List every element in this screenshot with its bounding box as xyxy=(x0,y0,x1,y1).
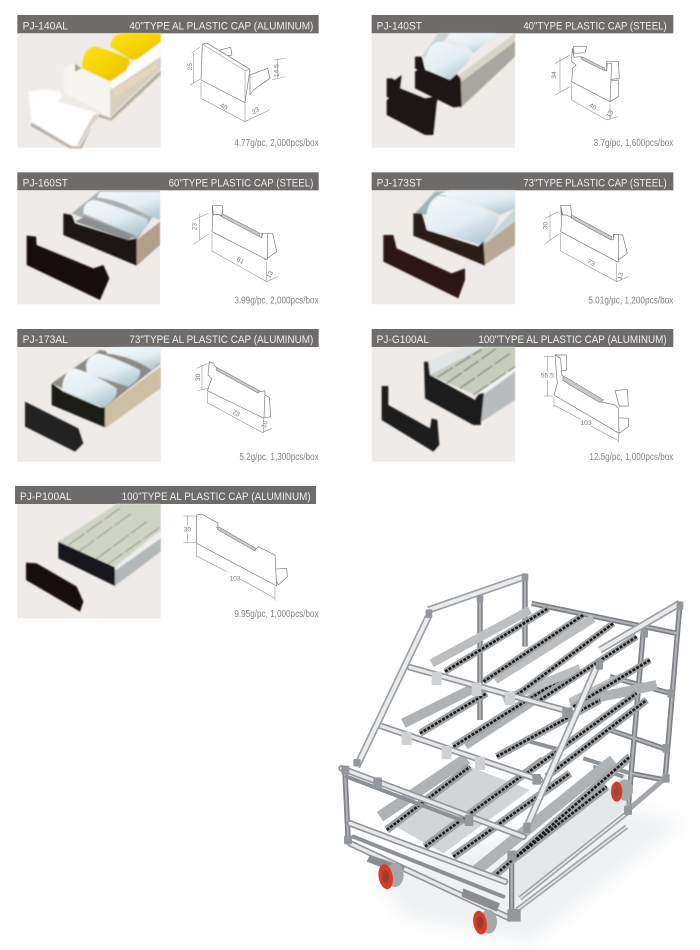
line drawing with dimensions: 40 xyxy=(218,102,229,112)
header bar: PJ-G100AL: 100"TYPE AL PLASTIC CAP (ALUMINUM) xyxy=(478,334,667,346)
card: PJ-140ST xyxy=(372,15,673,149)
header bar: PJ-140ST xyxy=(372,15,673,33)
line drawing with dimensions: 13 xyxy=(265,270,275,280)
header bar: PJ-173ST: PJ-173ST xyxy=(377,177,422,189)
header bar: PJ-160ST: PJ-160ST xyxy=(23,177,68,189)
floor shadow xyxy=(373,807,683,943)
product photo: black cap with white rollers xyxy=(17,190,160,304)
line drawing with dimensions: 30 xyxy=(184,527,191,534)
header bar: PJ-140AL xyxy=(17,15,319,33)
line drawing with dimensions xyxy=(183,514,287,601)
line drawing with dimensions xyxy=(192,206,278,282)
spec caption: 5.01g/pc, 1,200pcs/box xyxy=(588,295,673,306)
header bar: PJ-160ST: 60"TYPE PLASTIC CAP (STEEL) xyxy=(169,177,313,189)
line drawing with dimensions xyxy=(551,47,619,120)
middle shelf tracks xyxy=(403,673,657,777)
diagonal and top rails xyxy=(357,577,680,823)
line drawing with dimensions: 73 xyxy=(586,258,596,268)
header bar: PJ-160ST xyxy=(17,172,319,190)
illustration: roller rack cart xyxy=(341,573,683,943)
product photo: black cap with white rollers on aluminum rail xyxy=(17,347,161,462)
line drawing with dimensions: 55.5 xyxy=(541,372,554,379)
header bar: PJ-140AL: PJ-140AL xyxy=(23,20,68,32)
line drawing with dimensions: 23 xyxy=(192,223,199,230)
header bar: PJ-G100AL: PJ-G100AL xyxy=(377,334,429,346)
line drawing with dimensions: 40 xyxy=(587,102,598,112)
caster wheels xyxy=(367,779,633,936)
spec caption: 3.7g/pc, 1,600pcs/box xyxy=(594,138,673,149)
line drawing with dimensions: 13 xyxy=(617,272,625,281)
header bar: PJ-P100AL: 100"TYPE AL PLASTIC CAP (ALUMINUM) xyxy=(122,491,311,503)
header bar: PJ-173AL xyxy=(17,329,319,347)
line drawing with dimensions: 103 xyxy=(580,420,592,427)
line drawing with dimensions: 61 xyxy=(235,256,245,266)
card: PJ-173ST xyxy=(372,172,673,306)
product photo: black cap with light blue rollers xyxy=(372,33,515,148)
product photo: black flat cap with dense rollers xyxy=(17,504,161,618)
spec caption: 9.95g/pc, 1,000pcs/box xyxy=(234,609,319,620)
line drawing with dimensions: 10 xyxy=(261,420,270,429)
header bar: PJ-P100AL: PJ-P100AL xyxy=(20,491,72,503)
card: PJ-140AL xyxy=(17,15,319,149)
line drawing with dimensions: 25 xyxy=(187,63,194,70)
product photo: black U cap with many rollers xyxy=(372,347,515,462)
card: PJ-173AL xyxy=(17,329,319,463)
top shelf tracks xyxy=(432,608,650,707)
header bar: PJ-140AL: 40"TYPE AL PLASTIC CAP (ALUMINUM) xyxy=(129,20,313,32)
header bar: PJ-140ST: 40"TYPE PLASTIC CAP (STEEL) xyxy=(523,20,667,32)
product photo: white cap with yellow rollers xyxy=(17,33,161,148)
header bar: PJ-173AL: PJ-173AL xyxy=(23,334,68,346)
line drawing with dimensions: 14.5 xyxy=(273,64,280,77)
card: PJ-160ST xyxy=(17,172,319,306)
spec caption: 3.99g/pc, 2,000pcs/box xyxy=(234,295,319,306)
line drawing with dimensions xyxy=(542,206,628,282)
header bar: PJ-173ST xyxy=(372,172,673,190)
product photo: dark brown cap with white rollers xyxy=(372,190,515,304)
spec caption: 4.77g/pc, 2,000pcs/box xyxy=(234,138,319,149)
line drawing with dimensions xyxy=(195,362,272,433)
header bar: PJ-P100AL xyxy=(15,486,316,504)
card: PJ-G100AL xyxy=(372,329,673,463)
header bar: PJ-140ST: PJ-140ST xyxy=(377,20,422,32)
spec caption: 5.2g/pc, 1,300pcs/box xyxy=(239,452,319,463)
header bar: PJ-G100AL xyxy=(372,329,673,347)
spec caption: 12.5g/pc, 1,000pcs/box xyxy=(589,452,673,463)
line drawing with dimensions: 30 xyxy=(195,373,202,381)
line drawing with dimensions: 30 xyxy=(542,222,549,229)
line drawing with dimensions: 34 xyxy=(551,71,558,79)
line drawing with dimensions: 103 xyxy=(229,576,241,583)
base and floor plates xyxy=(390,742,665,910)
lower shelf tracks xyxy=(380,757,630,877)
line drawing with dimensions xyxy=(187,43,285,122)
line drawing with dimensions: 23 xyxy=(251,106,261,116)
front bars xyxy=(342,667,570,918)
rear posts and rails xyxy=(345,575,680,918)
clamps xyxy=(341,573,683,922)
header bar: PJ-173ST: 73"TYPE PLASTIC CAP (STEEL) xyxy=(523,177,667,189)
line drawing with dimensions: 73 xyxy=(231,409,241,419)
line drawing with dimensions: 13 xyxy=(605,109,615,119)
line drawing with dimensions xyxy=(541,355,628,443)
header bar: PJ-173AL: 73"TYPE AL PLASTIC CAP (ALUMINUM) xyxy=(129,334,313,346)
card: PJ-P100AL xyxy=(15,486,319,620)
